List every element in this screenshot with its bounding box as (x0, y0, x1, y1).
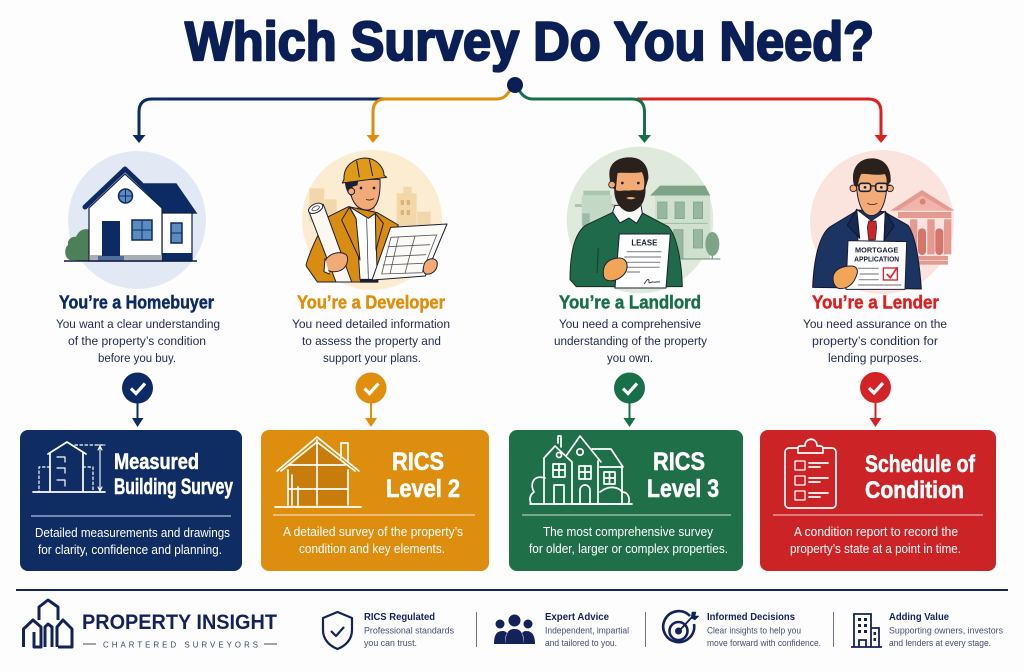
check badge: developer (356, 372, 386, 427)
icon: measured building (33, 442, 105, 492)
description: developer: support your plans. (323, 351, 421, 365)
connector: orange to developer (366, 88, 511, 143)
persona: homebuyer (56, 292, 220, 427)
card description: for clarity, confidence and planning. (38, 543, 222, 557)
feature text: and tailored to you. (545, 638, 617, 649)
feature: expert advice (494, 611, 629, 649)
card description: condition and key elements. (299, 542, 445, 556)
persona: lender (803, 292, 947, 427)
card title (114, 449, 234, 499)
feature text: Expert Advice (545, 611, 609, 623)
card title: Building Survey (114, 474, 234, 499)
description: homebuyer (56, 317, 220, 365)
connector tree (132, 77, 888, 143)
feature text: Supporting owners, investors (889, 626, 1003, 636)
connector: navy to homebuyer (132, 99, 385, 143)
illustration: lender: APPLICATION (854, 255, 900, 264)
illustration: landlord (567, 147, 720, 293)
card title (386, 448, 460, 503)
card title: Level 2 (386, 475, 460, 503)
logo tagline: CHARTERED SURVEYORS (103, 640, 258, 650)
heading: lender: You’re a Lender (812, 292, 939, 312)
icon: target (663, 611, 699, 642)
heading: developer: You’re a Developer (297, 292, 445, 312)
description: landlord: understanding of the property (554, 334, 708, 348)
icon: buildings (851, 614, 882, 647)
check badge: lender (860, 372, 891, 427)
description: landlord (554, 317, 708, 365)
description: landlord: You need a comprehensive (559, 317, 701, 331)
illustration: house (64, 151, 206, 289)
illustration: lender: MORTGAGE (855, 246, 898, 255)
illustration: landlord: LEASE (631, 239, 658, 248)
feature text: Clear insights to help you (707, 626, 801, 636)
card: RICS level 2 (261, 430, 489, 571)
illustration: lender (810, 150, 955, 294)
card description (35, 526, 230, 557)
feature text: Professional standards (364, 626, 454, 636)
check badge: landlord (614, 372, 645, 427)
description: developer (292, 317, 450, 365)
description: lender (803, 317, 947, 365)
feature text: you can trust. (364, 638, 417, 649)
title: Which Survey Do You Need? (185, 10, 874, 72)
check badge: homebuyer (122, 372, 153, 427)
illustration: developer (302, 150, 447, 290)
card title (647, 448, 719, 503)
logo mark (24, 600, 72, 647)
feature: RICS regulated (323, 611, 454, 649)
description: homebuyer: before you buy. (98, 351, 176, 365)
icon: large house (530, 436, 632, 504)
persona: developer (292, 292, 450, 427)
card description (529, 525, 728, 556)
persona: landlord (554, 292, 708, 427)
card description (790, 525, 961, 556)
connector: red to lender (637, 99, 888, 143)
feature text: Independent, impartial (545, 626, 629, 636)
feature text: and lenders at every stage. (889, 638, 991, 649)
card: schedule of condition (760, 430, 996, 571)
icon: clipboard checklist (785, 439, 836, 508)
footer logo (24, 600, 277, 650)
feature text (707, 611, 821, 649)
description: lender: You need assurance on the (803, 317, 947, 331)
card title: Level 3 (647, 475, 719, 503)
card: measured building survey (20, 430, 242, 571)
card title (865, 451, 976, 504)
card description: A condition report to record the (794, 525, 958, 539)
card description: Detailed measurements and drawings (35, 526, 230, 540)
heading: landlord: You’re a Landlord (559, 292, 701, 312)
card title: Measured (114, 449, 199, 474)
feature text: Informed Decisions (707, 611, 795, 623)
feature text (364, 611, 454, 649)
logo wordmark: PROPERTY INSIGHT (82, 610, 277, 634)
heading: homebuyer: You’re a Homebuyer (59, 292, 214, 312)
icon: people (494, 614, 535, 644)
description: landlord: you own. (607, 351, 653, 365)
description: homebuyer: of the property’s condition (68, 334, 206, 348)
feature: informed decisions (663, 611, 821, 649)
feature text (889, 611, 1003, 649)
feature text (545, 611, 629, 649)
card description: The most comprehensive survey (543, 525, 714, 539)
card: RICS level 3 (509, 430, 743, 571)
card description: property’s state at a point in time. (790, 542, 961, 556)
feature text: Adding Value (889, 611, 949, 623)
feature text: move forward with confidence. (707, 638, 821, 649)
feature: adding value (851, 611, 1003, 649)
card title: Schedule of (865, 451, 976, 478)
connector hub dot (507, 77, 523, 93)
icon: shield (323, 612, 352, 649)
icon: house cross-section (275, 437, 361, 507)
card description: A detailed survey of the property’s (283, 525, 463, 539)
card description (283, 525, 463, 556)
description: developer: You need detailed information (292, 317, 450, 331)
card title: Condition (865, 477, 964, 504)
description: developer: to assess the property and (302, 334, 441, 348)
card title: RICS (392, 448, 444, 476)
card title: RICS (653, 448, 705, 476)
description: homebuyer: You want a clear understanding (56, 317, 220, 331)
feature text: RICS Regulated (364, 611, 435, 623)
description: lender: property’s condition for (812, 334, 938, 348)
card description: for older, larger or complex properties. (529, 542, 728, 556)
description: lender: lending purposes. (828, 351, 922, 365)
connector: green to landlord (519, 90, 651, 143)
